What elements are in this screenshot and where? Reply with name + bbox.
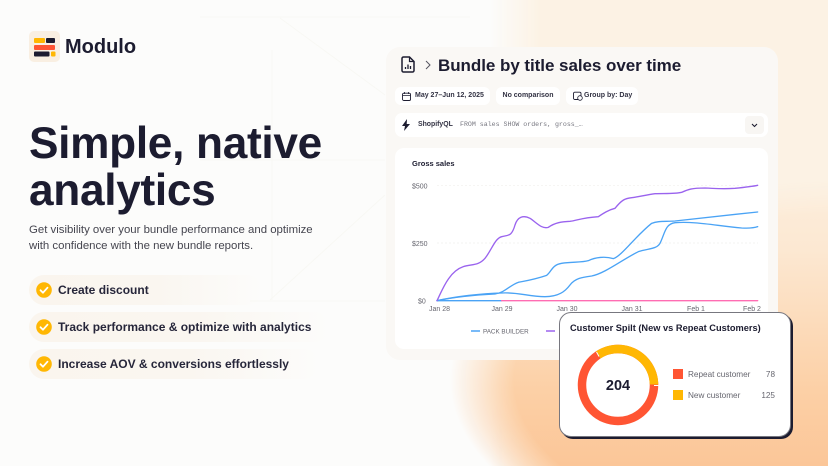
y axis labels: $500 — [412, 184, 428, 190]
chart title: Gross sales — [412, 159, 455, 168]
card title: Customer Spilt (New vs Repeat Customers) — [570, 323, 761, 333]
panel: chart — [395, 148, 768, 349]
x axis labels: Feb 2 — [743, 306, 761, 313]
feature: create discount: Create discount — [58, 283, 149, 297]
panel: customer split — [559, 312, 791, 437]
icon: modulo logo — [29, 31, 60, 62]
icon: calendar clock — [573, 92, 583, 101]
x axis labels — [429, 306, 761, 313]
chip: group by: Group by: Day — [584, 92, 632, 99]
x axis labels: Jan 31 — [621, 306, 643, 313]
description: Get visibility over your bundle performance and optimize — [29, 224, 313, 236]
legend: new customer: 125 — [761, 391, 775, 400]
title: Simple, native — [29, 119, 322, 168]
title: analytics — [29, 166, 215, 215]
title — [29, 119, 322, 215]
line: blue upper — [437, 212, 758, 301]
background gradient — [456, 0, 828, 466]
report title: Bundle by title sales over time — [438, 56, 681, 75]
gridlines — [437, 186, 758, 243]
logo — [29, 31, 136, 62]
x axis labels: Jan 28 — [429, 306, 450, 313]
icon: check — [36, 319, 52, 335]
y axis labels: $250 — [412, 241, 428, 248]
chip: comparison — [496, 87, 560, 105]
icon: lightning — [402, 119, 410, 131]
description: with confidence with the new bundle reports. — [29, 240, 253, 252]
panel: report — [386, 47, 778, 360]
query code: FROM sales SHOW orders, gross_… — [460, 121, 583, 128]
feature: track performance — [29, 312, 329, 342]
x axis labels: Jan 29 — [491, 306, 513, 313]
legend: repeat customer — [673, 369, 775, 379]
y axis labels: $0 — [418, 298, 426, 306]
feature list — [29, 275, 311, 379]
chip: date range — [395, 87, 490, 105]
legend: repeat customer: 78 — [766, 370, 775, 379]
chip: group by — [566, 87, 638, 105]
donut chart — [578, 344, 658, 426]
legend: new customer: New customer — [688, 391, 740, 400]
x axis labels: Feb 1 — [687, 306, 705, 313]
icon: report file — [401, 56, 415, 73]
feature: track performance: Track performance & optimize with analytics — [58, 320, 311, 334]
line: pink flat — [502, 299, 758, 303]
legend: repeat customer: Repeat customer — [688, 370, 750, 379]
x axis labels: Jan 30 — [556, 306, 578, 313]
query label: ShopifyQL — [418, 121, 453, 128]
icon: check — [36, 282, 52, 298]
brand name: Modulo — [65, 36, 136, 58]
feature: increase AOV — [29, 349, 319, 379]
legend: PACK BUILDER — [483, 328, 529, 336]
icon: chevron — [426, 60, 431, 70]
feature: create discount — [29, 275, 262, 305]
description — [29, 224, 313, 252]
line: blue flat — [437, 299, 502, 303]
icon: check — [36, 356, 52, 372]
legend — [471, 328, 555, 336]
donut total: 204 — [606, 378, 630, 394]
feature: increase AOV: Increase AOV & conversions effortlessly — [58, 357, 289, 371]
chip: date range: May 27–Jun 12, 2025 — [415, 92, 484, 99]
y axis labels — [412, 184, 428, 306]
line: blue lower — [437, 222, 758, 301]
line: purple — [437, 185, 758, 301]
icon: dropdown — [745, 116, 764, 134]
legend: new customer — [673, 390, 775, 400]
query bar — [395, 113, 768, 137]
chip: comparison: No comparison — [503, 92, 553, 99]
icon: calendar — [402, 92, 411, 101]
data lines — [437, 185, 758, 301]
